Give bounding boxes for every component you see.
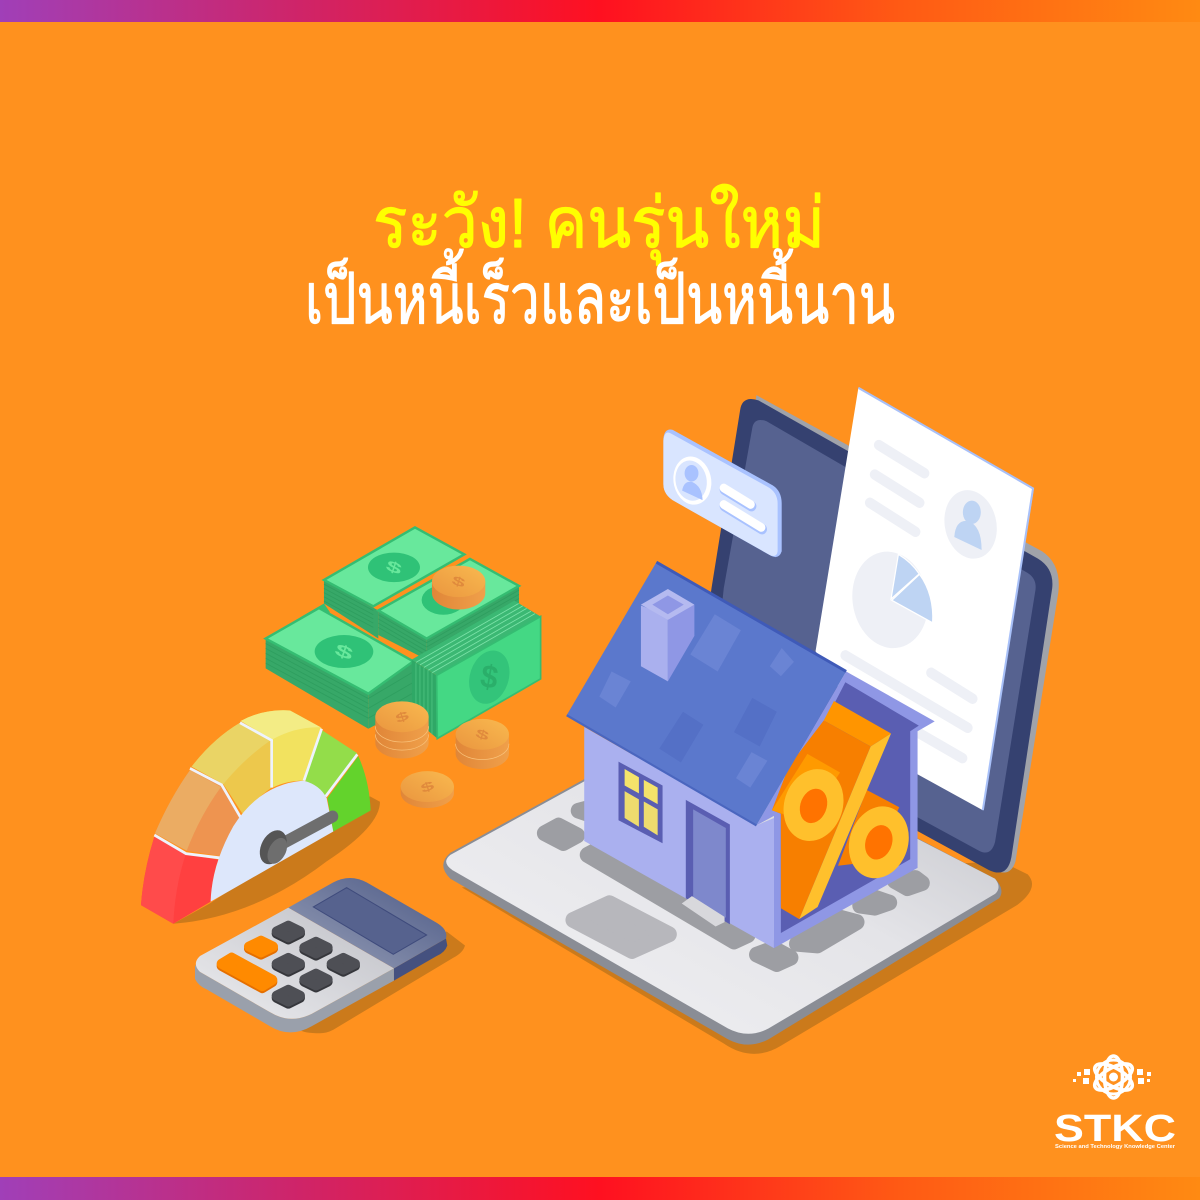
coin stack right: $ — [474, 726, 491, 744]
title — [305, 183, 895, 338]
logo wordmark: STKC — [1054, 1108, 1176, 1150]
house window — [618, 762, 663, 843]
laptop shadow — [462, 861, 1032, 1054]
coin on money — [432, 566, 485, 609]
bill stack front left: $ — [332, 639, 356, 664]
house front wall — [584, 727, 774, 948]
calculator — [195, 878, 465, 1033]
house side opening — [781, 682, 919, 933]
document page — [816, 388, 1034, 810]
single coin: $ — [419, 778, 436, 796]
logo pixel squares — [1073, 1069, 1151, 1084]
gauge dial — [211, 781, 333, 902]
bill stack upright: $ — [478, 658, 501, 696]
illustration: gauge, money and calculator — [141, 527, 541, 1033]
calculator shadow — [300, 931, 465, 1033]
document pie chart — [844, 544, 936, 656]
calculator body — [195, 878, 447, 1032]
gauge needle — [254, 816, 333, 869]
money stacks — [266, 527, 541, 739]
title line 1: ระวัง! คนรุ่นใหม่ — [373, 183, 825, 266]
house door — [682, 800, 730, 926]
coin on money: $ — [450, 573, 467, 591]
percent symbol — [772, 701, 919, 919]
house — [567, 562, 935, 948]
credit gauge — [141, 710, 371, 924]
bill stack upright — [412, 601, 541, 739]
coin stack right — [456, 719, 509, 769]
bill stack back: $ — [384, 556, 405, 578]
gauge shadow — [173, 796, 380, 924]
coin stack left: $ — [394, 709, 411, 726]
house side frame — [756, 671, 935, 948]
bill stack front left — [266, 608, 413, 729]
top gradient bar — [0, 0, 1200, 22]
bill stack back — [300, 527, 464, 639]
calculator orange buttons — [221, 941, 273, 988]
house roof — [567, 562, 846, 825]
profile card — [663, 430, 782, 557]
laptop keys — [544, 807, 922, 964]
document text lines — [845, 445, 973, 758]
bill stack right — [378, 559, 519, 660]
calculator screen — [313, 888, 427, 954]
single coin — [401, 771, 454, 808]
illustration: laptop, tablet and house — [443, 388, 1059, 1054]
bottom gradient bar — [0, 1177, 1200, 1200]
STKC logo — [1054, 1056, 1176, 1150]
chimney — [641, 589, 694, 681]
laptop base — [443, 720, 1001, 1045]
tablet — [695, 395, 1059, 873]
logo atom emblem — [1091, 1056, 1136, 1098]
coin stack left — [375, 701, 429, 759]
calculator dark buttons — [276, 926, 355, 1004]
document avatar — [937, 484, 1004, 565]
title line 2: เป็นหนี้เร็วและเป็นหนี้นาน — [305, 248, 895, 338]
logo tagline: Science and Technology Knowledge Center — [1055, 1144, 1176, 1150]
